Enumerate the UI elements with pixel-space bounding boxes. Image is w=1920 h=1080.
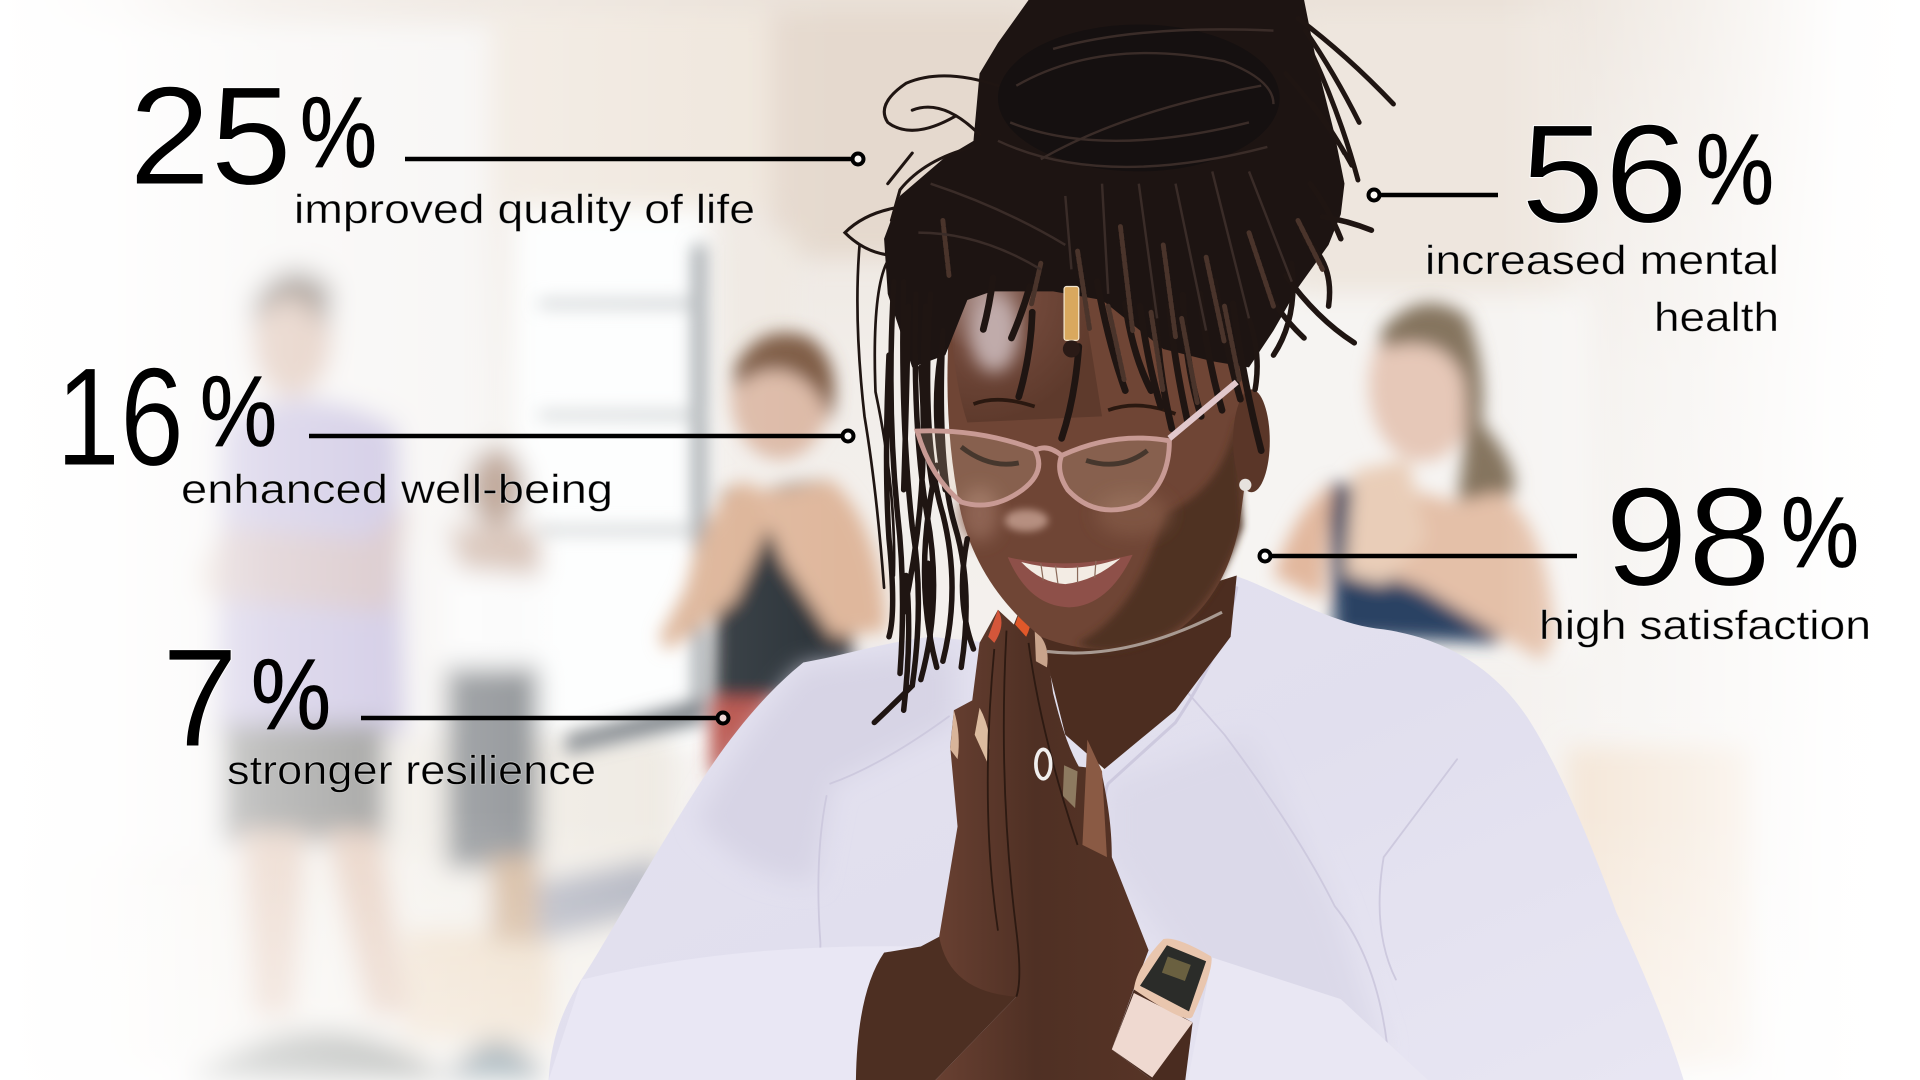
label: improved quality of life — [294, 186, 755, 232]
percent sign: % — [300, 77, 377, 189]
right wrist — [1112, 989, 1193, 1080]
connector line — [361, 712, 728, 724]
percent sign: % — [200, 356, 277, 468]
label: enhanced well-being — [181, 466, 613, 512]
smile — [1008, 555, 1133, 607]
sweatshirt — [549, 576, 1684, 1080]
clasped hands — [918, 600, 1152, 1080]
eyes and brows — [961, 447, 1147, 464]
right participant — [1360, 340, 1471, 470]
upper left flyaway wisps — [845, 76, 998, 255]
main hair mass and bun — [884, 0, 1344, 367]
stat: 98% high satisfaction — [1260, 458, 1871, 648]
bun coil highlights — [918, 29, 1292, 331]
blurred room and class participants — [204, 20, 1744, 1080]
stat: 16% enhanced well-being — [56, 338, 854, 512]
neck and chest — [1041, 576, 1237, 769]
smartwatch — [1112, 939, 1212, 1078]
face — [947, 263, 1270, 651]
connector line — [1368, 190, 1498, 200]
left participant — [251, 276, 332, 398]
gold hair bead — [1064, 287, 1079, 340]
label: stronger resilience — [227, 747, 596, 793]
small background participant — [467, 448, 525, 527]
finger details and nails — [950, 600, 1107, 997]
stat: 25% improved quality of life — [129, 57, 864, 232]
center participant — [731, 337, 829, 459]
fringe highlights — [943, 220, 1322, 404]
necklace — [1047, 612, 1222, 653]
value 25: 25 — [129, 57, 292, 214]
stat: 56% increased mental health — [1368, 95, 1779, 340]
sweatshirt seams and folds — [549, 588, 1457, 1080]
connector line — [1260, 550, 1577, 562]
window mullions — [693, 245, 705, 722]
label line 2: health — [1654, 294, 1779, 340]
connector line — [309, 430, 854, 442]
percent sign: % — [251, 639, 331, 751]
label line 1: increased mental — [1425, 237, 1779, 283]
value 7: 7 — [162, 619, 238, 776]
percent sign: % — [1781, 477, 1859, 589]
left side locs — [874, 282, 973, 722]
glasses — [917, 382, 1237, 510]
value 98: 98 — [1605, 458, 1771, 615]
forehead fringe locs — [983, 278, 1261, 451]
upper right flyaway locs — [1308, 24, 1396, 182]
value 16: 16 — [56, 338, 184, 495]
left forearm — [856, 937, 1016, 1080]
label: high satisfaction — [1539, 602, 1871, 648]
hair — [845, 0, 1393, 722]
individual locs — [845, 18, 1393, 722]
connector line — [405, 154, 864, 164]
woman in foreground — [549, 0, 1684, 1080]
percent sign: % — [1696, 114, 1774, 226]
value 56: 56 — [1521, 95, 1688, 252]
stat: 7% stronger resilience — [162, 619, 728, 793]
